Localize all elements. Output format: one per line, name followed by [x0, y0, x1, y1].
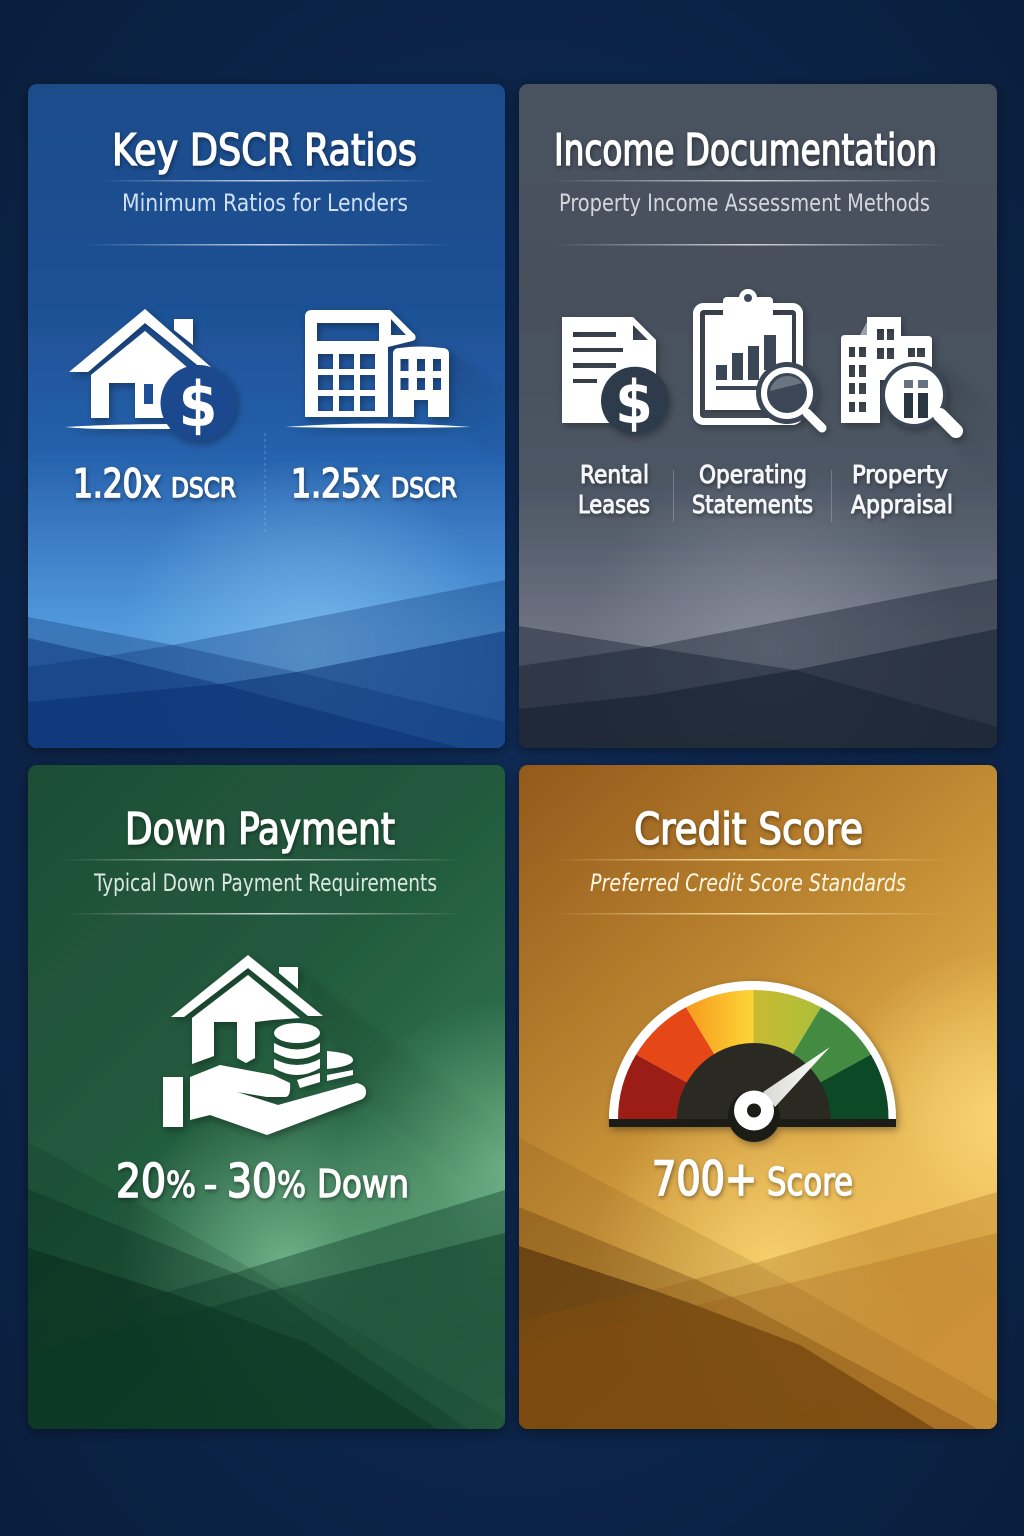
- subtitle: minimum ratios: Minimum Ratios for Lenders: [122, 189, 408, 217]
- stat: 1.25x DSCR: 1.25x: [291, 462, 380, 507]
- stat: 20% - 30% Down: Down: [317, 1162, 409, 1206]
- subtitle: assessment methods: Property Income Assessment Methods: [559, 189, 930, 217]
- icon: buildings with magnifier: [841, 317, 956, 431]
- icon: clipboard with chart: [696, 289, 822, 428]
- icon: house with dollar: $: [179, 368, 217, 441]
- icon: house, coins and hand: [163, 955, 366, 1135]
- label: Property Appraisal: [851, 460, 953, 519]
- stat: 700+ Score: [652, 1152, 853, 1207]
- panel: Key DSCR Ratios: [28, 84, 505, 748]
- label: Property Appraisal: Appraisal: [851, 490, 953, 519]
- stat: 1.20x DSCR: DSCR: [171, 473, 236, 504]
- stat: 20% - 30% Down: 30: [227, 1154, 277, 1208]
- heading: Income Documentation: Income Documentation: [554, 125, 937, 176]
- label: Rental Leases: [578, 460, 650, 519]
- stat: 1.20x DSCR: 1.20x: [73, 462, 161, 507]
- stat: 1.20x DSCR: [73, 462, 236, 507]
- label: Property Appraisal: Property: [852, 460, 948, 489]
- label: Rental Leases: Rental: [580, 460, 649, 489]
- stat: 20% - 30% Down: %: [166, 1165, 196, 1206]
- stat: 20% - 30% Down: 20: [116, 1154, 166, 1208]
- subtitle: credit standards: Preferred Credit Score Standards: [590, 869, 906, 897]
- icon: house with dollar: [65, 309, 236, 441]
- stat: 20% - 30% Down: -: [204, 1165, 217, 1206]
- stat: 1.25x DSCR: DSCR: [391, 473, 457, 504]
- label: Operating Statements: Operating: [699, 460, 807, 489]
- label: Rental Leases: Leases: [578, 490, 650, 519]
- subtitle: requirements: Typical Down Payment Requirements: [93, 869, 437, 897]
- panel: Income Documentation: [519, 84, 997, 748]
- stat: 700+ Score: 700+: [652, 1152, 757, 1207]
- panel: Down Payment: [28, 765, 505, 1429]
- heading: Credit Score: Credit Score: [634, 804, 863, 855]
- stat: 1.25x DSCR: [291, 462, 457, 507]
- chart: credit score gauge: [609, 981, 896, 1142]
- icon: calculator and building: [285, 310, 471, 428]
- stat: 20% - 30% Down: %: [277, 1165, 306, 1206]
- heading: Down Payment: Down Payment: [125, 804, 395, 855]
- stat: 20% - 30% Down: [116, 1154, 409, 1208]
- icon: rental lease document: [562, 317, 669, 438]
- label: Operating Statements: Statements: [692, 490, 813, 519]
- icon: rental lease document: $: [615, 368, 653, 438]
- stat: 700+ Score: Score: [767, 1160, 853, 1204]
- panel: Credit Score: [519, 765, 997, 1429]
- heading: Key DSCR Ratios: Key DSCR Ratios: [112, 125, 417, 176]
- label: Operating Statements: [692, 460, 813, 519]
